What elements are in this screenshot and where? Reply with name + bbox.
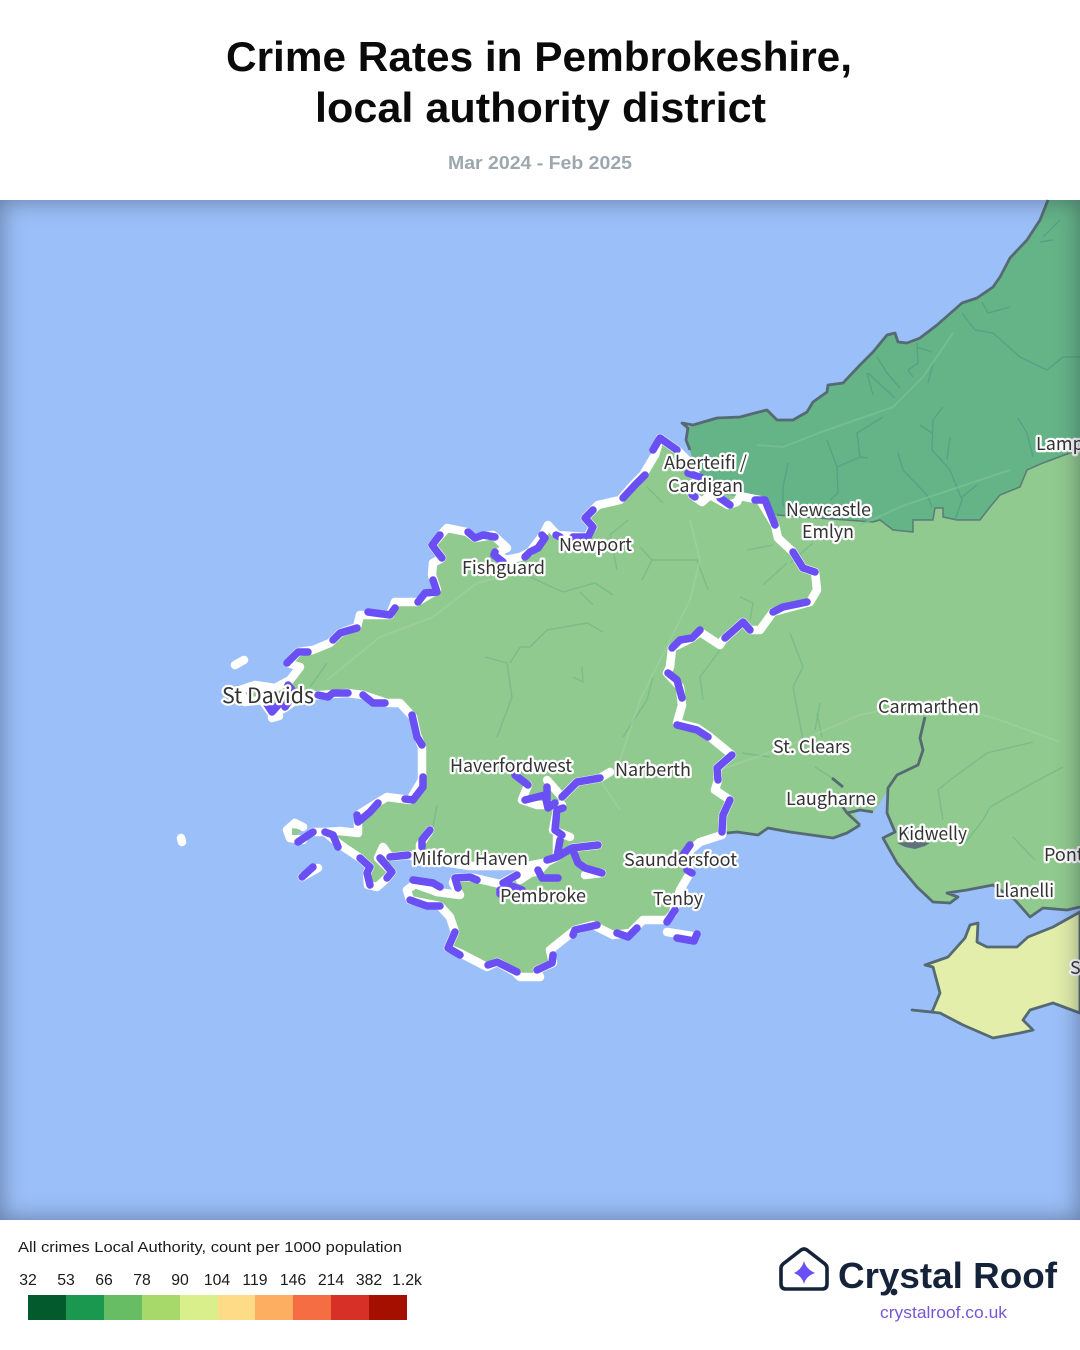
legend scale labels: 66 — [95, 1272, 113, 1289]
legend scale labels: 214 — [318, 1272, 344, 1289]
legend scale labels: 119 — [242, 1272, 268, 1289]
place labels: St Davids — [222, 680, 314, 710]
land: mainland and Pembrokeshire — [240, 438, 1080, 977]
coastline: Carmarthenshire — [727, 717, 1080, 917]
legend scale labels — [19, 1272, 422, 1289]
map panel — [0, 200, 1080, 1220]
legend title: All crimes Local Authority, count per 1000 population — [18, 1239, 402, 1256]
subtitle: date range: Mar 2024 - Feb 2025 — [448, 153, 632, 173]
place labels: Laugharne — [786, 785, 876, 811]
icon: house outline with star — [781, 1249, 827, 1289]
place labels: Kidwelly — [898, 820, 968, 846]
website link text: crystalroof.co.uk — [880, 1304, 1008, 1322]
place labels: Pembroke — [500, 882, 586, 908]
place labels: Emlyn — [802, 518, 854, 544]
Daugleddau branches — [420, 772, 610, 880]
sea — [0, 200, 1080, 1220]
legend scale labels: 78 — [133, 1272, 151, 1289]
logo: Crystal Roof — [781, 1249, 1058, 1322]
road: Ceredigion — [757, 333, 1010, 525]
place labels: Carmarthen — [878, 693, 979, 719]
islands — [181, 660, 692, 936]
title: local authority district — [315, 84, 766, 131]
Pembrokeshire boundary: white line — [181, 438, 817, 977]
title — [226, 33, 852, 131]
legend colour bar — [28, 1295, 407, 1320]
legend — [18, 1239, 422, 1320]
rivers: Ceredigion — [783, 220, 1080, 520]
place labels: Newport — [559, 531, 632, 557]
place labels: St. Clears — [773, 733, 850, 759]
logo wordmark: Crystal Roof — [838, 1255, 1058, 1296]
legend scale labels: 90 — [171, 1272, 189, 1289]
place labels: Milford Haven — [412, 845, 528, 871]
place labels: Narberth — [615, 756, 691, 782]
place labels: Haverfordwest — [450, 752, 572, 778]
island fill: Skomer — [292, 828, 301, 835]
coastline: Ceredigion — [682, 200, 1048, 450]
place labels: Fishguard — [462, 554, 545, 580]
legend scale labels: 53 — [57, 1272, 75, 1289]
Pembrokeshire boundary: purple dashes — [263, 438, 815, 972]
title: Crime Rates in Pembrokeshire, — [226, 33, 852, 80]
place labels: Newcastle — [786, 496, 871, 522]
roads: main land — [327, 520, 1060, 810]
legend scale labels: 146 — [280, 1272, 306, 1289]
place labels: Saundersfoot — [624, 846, 737, 872]
legend scale labels: 1.2k — [392, 1272, 422, 1289]
legend scale labels: 32 — [19, 1272, 37, 1289]
region: Ceredigion (dark green) — [686, 200, 1080, 532]
place labels: Aberteifi / — [664, 449, 747, 475]
place labels — [222, 430, 1080, 980]
place labels: Cardigan — [668, 472, 743, 498]
coastal mud: Kidwelly — [897, 841, 930, 849]
place labels: Llanelli — [995, 877, 1054, 903]
rivers: Pembrokeshire and Carmarthenshire — [310, 487, 1063, 860]
region boundary: Ceredigion south edge — [777, 447, 1080, 532]
logo key dot — [891, 1289, 897, 1295]
region: Gower / Swansea (yellow) — [912, 912, 1080, 1038]
legend scale labels: 104 — [204, 1272, 230, 1289]
legend scale labels: 382 — [356, 1272, 382, 1289]
place labels: Tenby — [653, 885, 704, 911]
